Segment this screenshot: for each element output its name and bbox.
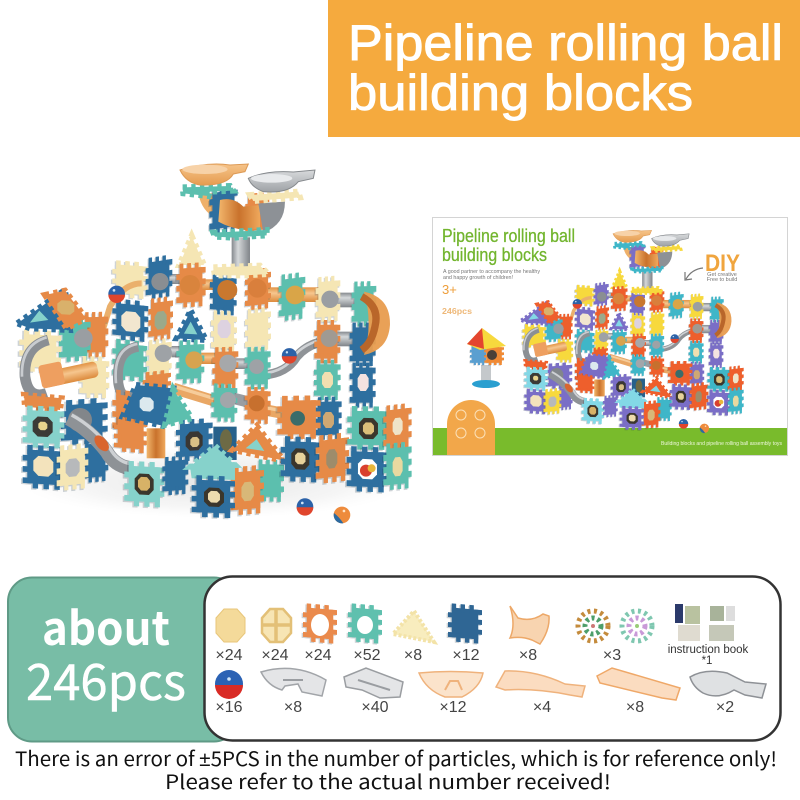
- pieces label: 246pcs: [26, 643, 186, 715]
- box title: building blocks: [442, 245, 547, 265]
- part: orange ring: [304, 607, 333, 664]
- part: gray funnel: ×2: [716, 699, 734, 716]
- box DIY callout: Free to build: [707, 277, 737, 283]
- part: orange S track: ×4: [533, 699, 551, 716]
- part: sticker sheets: [578, 611, 652, 664]
- part: sticker sheets: ×3: [603, 647, 621, 664]
- part: gray straight track: [344, 668, 403, 716]
- part: marble: ×16: [215, 699, 243, 716]
- box orange tab with icons: [447, 400, 495, 455]
- part: cream triangle: ×8: [404, 647, 422, 664]
- box arrow: [685, 268, 703, 280]
- part: orange elbow: [510, 606, 549, 664]
- part: solid octagon: ×24: [215, 647, 243, 664]
- about label: about: [42, 593, 170, 659]
- title line 2: building blocks: [348, 65, 693, 121]
- part: orange S track: [496, 671, 585, 716]
- box tagline: [443, 269, 540, 281]
- part: orange straight track: [597, 668, 680, 716]
- box strip caption: Building blocks and pipeline rolling ball assembly toys: [661, 441, 782, 447]
- part: orange ring: ×24: [304, 647, 332, 664]
- header banner: [328, 0, 800, 137]
- part: cross octagon: [261, 609, 291, 664]
- box piece count: 246pcs: [442, 306, 472, 316]
- box age: 3+: [442, 282, 457, 297]
- box tagline: A good partner to accompany the healthy: [443, 269, 540, 275]
- title line 1: Pipeline rolling ball: [348, 15, 783, 71]
- part: instruction book: [668, 604, 749, 667]
- part: cross octagon: ×24: [261, 647, 289, 664]
- part: gray funnel: [690, 671, 766, 716]
- part: blue panel: ×12: [452, 647, 480, 664]
- part: blue panel: [450, 607, 480, 664]
- box DIY callout: Get creative: [707, 272, 737, 278]
- part: marble: [215, 670, 243, 716]
- part: gray curved track: [261, 668, 326, 716]
- box title: Pipeline rolling ball: [442, 226, 575, 246]
- part: instruction book: *1: [702, 655, 712, 667]
- box DIY callout: DIY: [705, 250, 740, 277]
- count panel: [8, 578, 238, 742]
- part: orange curved track: [419, 672, 483, 716]
- main product photo: marble run structure: [17, 164, 410, 523]
- box green strip: [433, 428, 787, 455]
- part: orange straight track: ×8: [626, 699, 644, 716]
- part: orange curved track: ×12: [439, 699, 467, 716]
- note line 1: There is an error of ±5PCS in the number of particles, which is for reference only!: [15, 743, 777, 772]
- product box: [432, 218, 788, 456]
- box tagline: and happy growth of children!: [443, 275, 513, 281]
- part: instruction book: instruction book: [668, 644, 749, 656]
- part: gray curved track: ×8: [284, 699, 302, 716]
- note line 2: Please refer to the actual number received!: [165, 766, 611, 795]
- parts panel: [204, 576, 780, 740]
- part: solid octagon: [215, 609, 245, 664]
- box small house: [467, 328, 506, 388]
- part: teal ring: ×52: [353, 647, 381, 664]
- box structure image: [521, 230, 742, 433]
- part: gray straight track: ×40: [361, 699, 389, 716]
- part: orange elbow: ×8: [519, 647, 537, 664]
- part: cream triangle: [393, 611, 434, 664]
- box title: [442, 226, 575, 265]
- part: teal ring: [350, 607, 381, 664]
